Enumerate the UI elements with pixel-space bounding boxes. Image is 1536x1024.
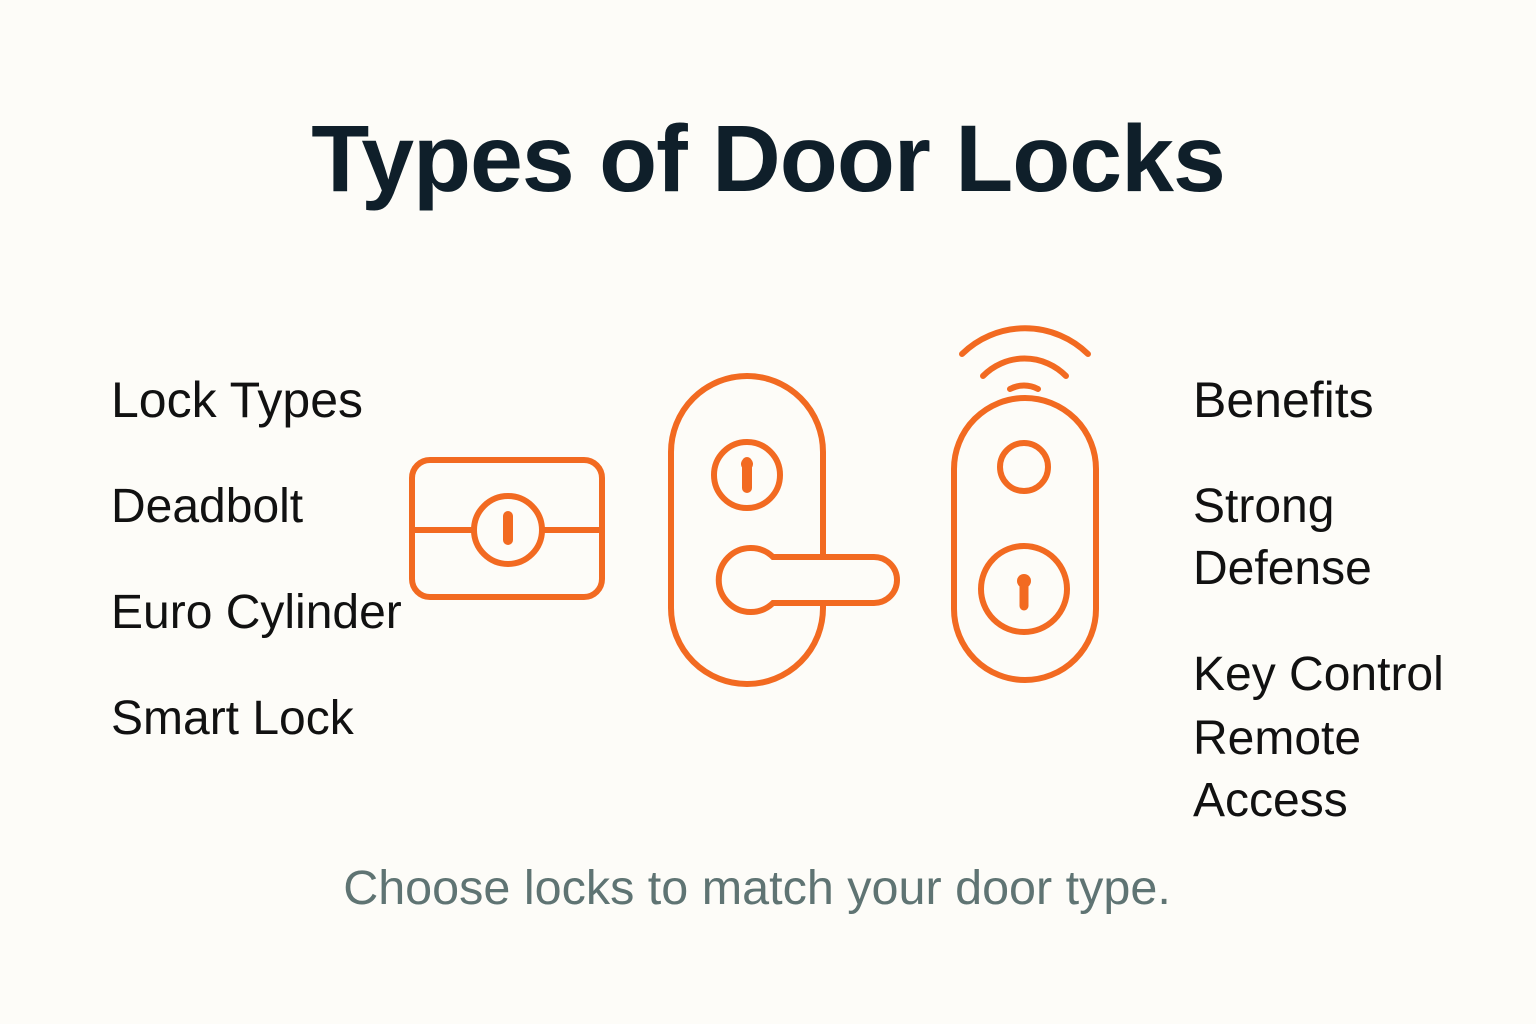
item: Strong Defense: Strong — [1193, 480, 1334, 533]
item: Strong Defense — [1193, 480, 1372, 595]
item: Key Control: Key Control — [1193, 648, 1444, 701]
panel: lock types list — [111, 372, 402, 745]
item: Strong Defense: Defense — [1193, 542, 1372, 595]
title: Types of Door Locks — [311, 106, 1225, 212]
item: Remote Access: Access — [1193, 774, 1348, 827]
item: Remote Access — [1193, 712, 1361, 827]
icon: deadbolt — [412, 460, 602, 597]
icon: euro cylinder lever lock — [671, 376, 897, 684]
panel: benefits list — [1193, 372, 1444, 827]
icon: smart lock — [954, 328, 1096, 680]
footer caption: Choose locks to match your door type. — [343, 861, 1171, 915]
item: Euro Cylinder: Euro Cylinder — [111, 586, 402, 639]
item: Remote Access: Remote — [1193, 712, 1361, 765]
heading: Lock Types: Lock Types — [111, 372, 363, 428]
heading: Benefits: Benefits — [1193, 372, 1374, 428]
icon: wifi signal — [962, 328, 1088, 389]
item: Smart Lock: Smart Lock — [111, 692, 354, 745]
item: Deadbolt: Deadbolt — [111, 480, 303, 533]
